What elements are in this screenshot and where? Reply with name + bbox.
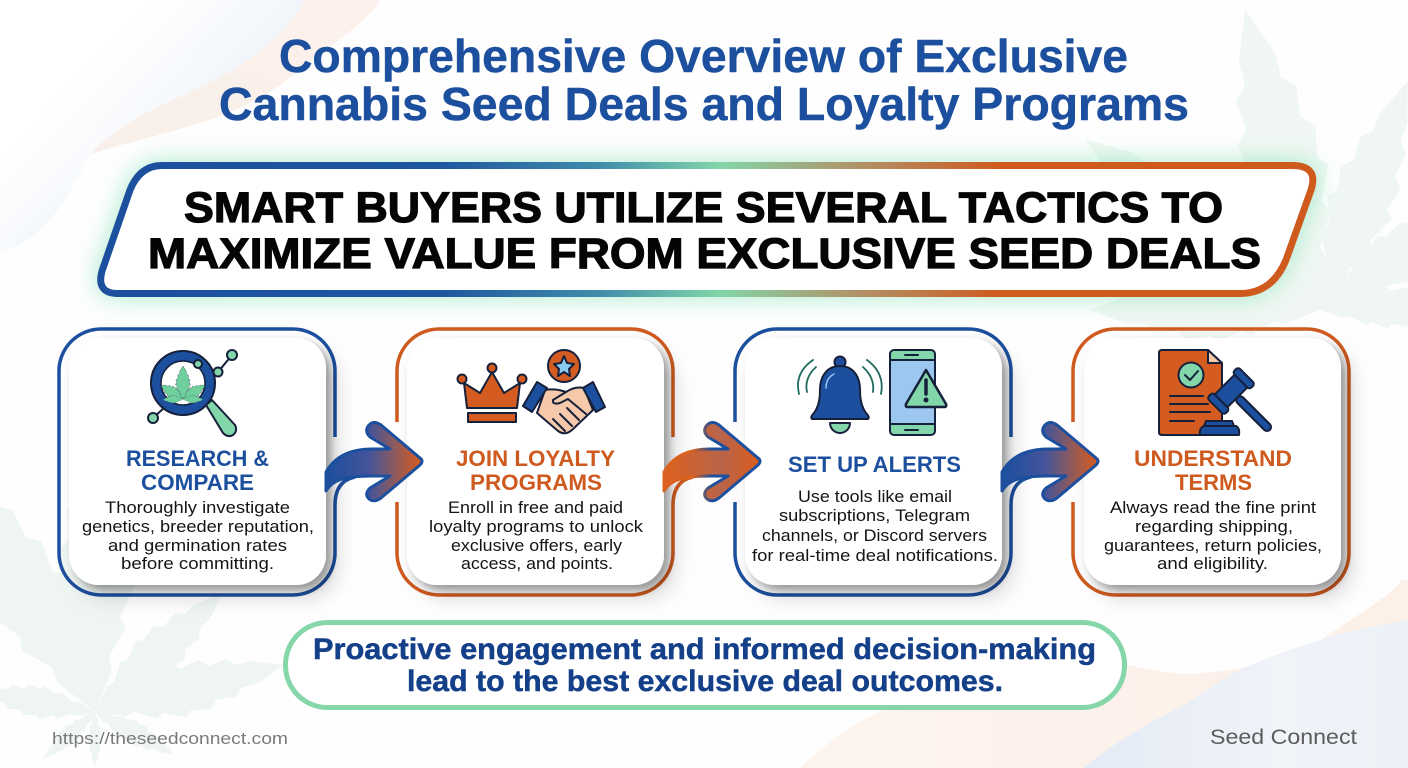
heading: understand terms: UNDERSTAND — [1134, 446, 1292, 471]
text: loyalty description: loyalty programs to unlock — [429, 518, 644, 536]
text: terms description: guarantees, return policies, — [1104, 537, 1322, 555]
text: research description: genetics, breeder reputation, — [82, 518, 314, 536]
text: research description — [82, 499, 314, 573]
callout: conclusion — [286, 622, 1124, 708]
heading: join loyalty programs: PROGRAMS — [470, 470, 602, 495]
panel: research and compare — [59, 329, 355, 595]
title: Comprehensive Overview of Exclusive — [279, 30, 1128, 82]
arrow: step 3 to 4 — [1002, 422, 1098, 501]
title: Cannabis Seed Deals and Loyalty Programs — [219, 78, 1189, 130]
text: terms description: and eligibility. — [1157, 555, 1268, 573]
panel: join loyalty programs — [397, 329, 693, 595]
text: alerts description: channels, or Discord servers — [762, 527, 987, 545]
text: research description: and germination rates — [108, 537, 287, 555]
arrow: step 2 to 3 — [664, 422, 760, 501]
heading: understand terms — [1134, 446, 1292, 495]
icon: magnifier with leaf — [148, 350, 237, 436]
text: research description: before committing. — [121, 555, 274, 573]
banner: headline — [101, 166, 1313, 294]
heading: join loyalty programs — [456, 446, 615, 495]
footer: url: https://theseedconnect.com — [52, 729, 288, 748]
heading: research and compare: COMPARE — [141, 470, 254, 495]
text: alerts description — [752, 488, 998, 565]
footer: brand: Seed Connect — [1210, 726, 1357, 749]
text: terms description — [1104, 499, 1322, 573]
panel: understand terms — [1073, 329, 1349, 595]
text: loyalty description: Enroll in free and paid — [448, 499, 623, 517]
text: loyalty description: access, and points. — [461, 555, 613, 573]
heading: set up alerts: SET UP ALERTS — [788, 452, 961, 477]
banner: headline: MAXIMIZE VALUE FROM EXCLUSIVE SEED DEALS — [148, 230, 1261, 278]
text: terms description: regarding shipping, — [1135, 518, 1293, 536]
text: alerts description: subscriptions, Telegram — [779, 507, 970, 525]
heading: research and compare: RESEARCH & — [126, 446, 269, 471]
title — [219, 30, 1189, 130]
text: alerts description: Use tools like email — [798, 488, 952, 506]
panel: set up alerts — [735, 329, 1031, 595]
icon: handshake with star badge — [523, 350, 605, 433]
text: alerts description: for real-time deal notifications. — [752, 547, 998, 565]
heading: research and compare — [126, 446, 269, 495]
icon: phone with warning — [890, 350, 946, 435]
text: research description: Thoroughly investigate — [105, 499, 290, 517]
text: terms description: Always read the fine print — [1110, 499, 1316, 517]
text: loyalty description: exclusive offers, early — [451, 537, 623, 555]
icon: ringing bell — [798, 356, 882, 433]
banner: headline: SMART BUYERS UTILIZE SEVERAL TACTICS TO — [184, 184, 1223, 232]
callout: conclusion: Proactive engagement and informed decision-making — [313, 633, 1096, 666]
heading: join loyalty programs: JOIN LOYALTY — [456, 446, 615, 471]
callout: conclusion: lead to the best exclusive deal outcomes. — [407, 665, 1003, 698]
icon: crown — [458, 364, 526, 422]
text: loyalty description — [429, 499, 644, 573]
icon: document and gavel — [1159, 350, 1285, 445]
heading: understand terms: TERMS — [1175, 470, 1252, 495]
arrow: step 1 to 2 — [326, 422, 422, 501]
